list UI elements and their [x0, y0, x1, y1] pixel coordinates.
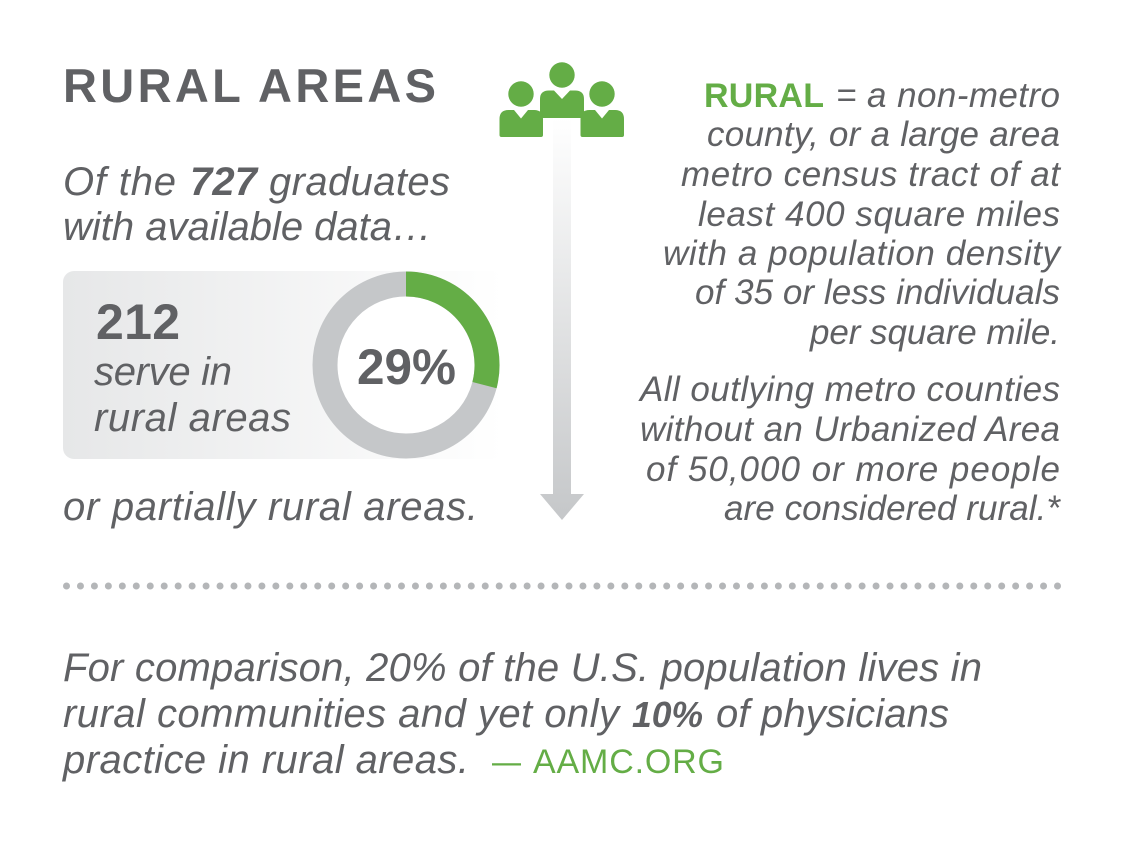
text block: outlying metro counties: All outlying metro counties [638, 370, 1060, 409]
icon: group of people [500, 62, 624, 137]
text block: comparison [62, 646, 982, 782]
arrow: downward gradient [540, 118, 584, 520]
source credit: — [492, 743, 521, 781]
text block: outlying metro counties: are considered rural.* [724, 489, 1061, 528]
text block: rural definition: metro census tract of at [681, 155, 1061, 194]
panel background [63, 271, 503, 459]
statistic label: rural areas [94, 396, 291, 440]
text block: intro [63, 160, 450, 249]
text block: intro: 727 [190, 160, 259, 204]
text block: intro: Of the [63, 160, 176, 204]
text block: comparison: 10% [632, 694, 703, 735]
text block: rural definition: least 400 square miles [698, 195, 1060, 234]
text block: outlying metro counties: of 50,000 or more people [646, 450, 1060, 489]
text block: intro: with available data… [63, 205, 432, 249]
text block: intro: graduates [269, 160, 450, 204]
text block: outlying metro counties: without an Urbanized Area [640, 410, 1060, 449]
donut chart: 29% [325, 284, 487, 446]
text block: comparison: For comparison, 20% of the U.S. population lives in [63, 646, 982, 690]
donut chart: 29%: 29% [357, 339, 456, 395]
text block: rural definition: with a population density [663, 234, 1062, 273]
text block: comparison: practice in rural areas. [62, 738, 469, 782]
text block: rural definition [663, 76, 1062, 352]
statistic: 212: 212 [96, 294, 180, 350]
statistic label: serve in [94, 350, 232, 394]
text block: rural definition: RURAL [704, 77, 824, 115]
source credit: AAMC.ORG [533, 743, 724, 781]
text block: rural definition: = a non-metro [836, 76, 1060, 115]
statistic label [94, 350, 291, 440]
text block: rural definition: per square mile. [809, 313, 1060, 352]
text block: rural definition: county, or a large area [707, 115, 1060, 154]
text block: rural definition: of 35 or less individuals [695, 273, 1060, 312]
text block: comparison: of physicians [716, 692, 949, 736]
text block: comparison: rural communities and yet only [63, 692, 622, 736]
text block: outlying metro counties [638, 370, 1061, 528]
title: RURAL AREAS [63, 59, 436, 112]
panel: rural service statistic [63, 271, 503, 459]
text block: intro continued: or partially rural areas. [63, 485, 478, 529]
